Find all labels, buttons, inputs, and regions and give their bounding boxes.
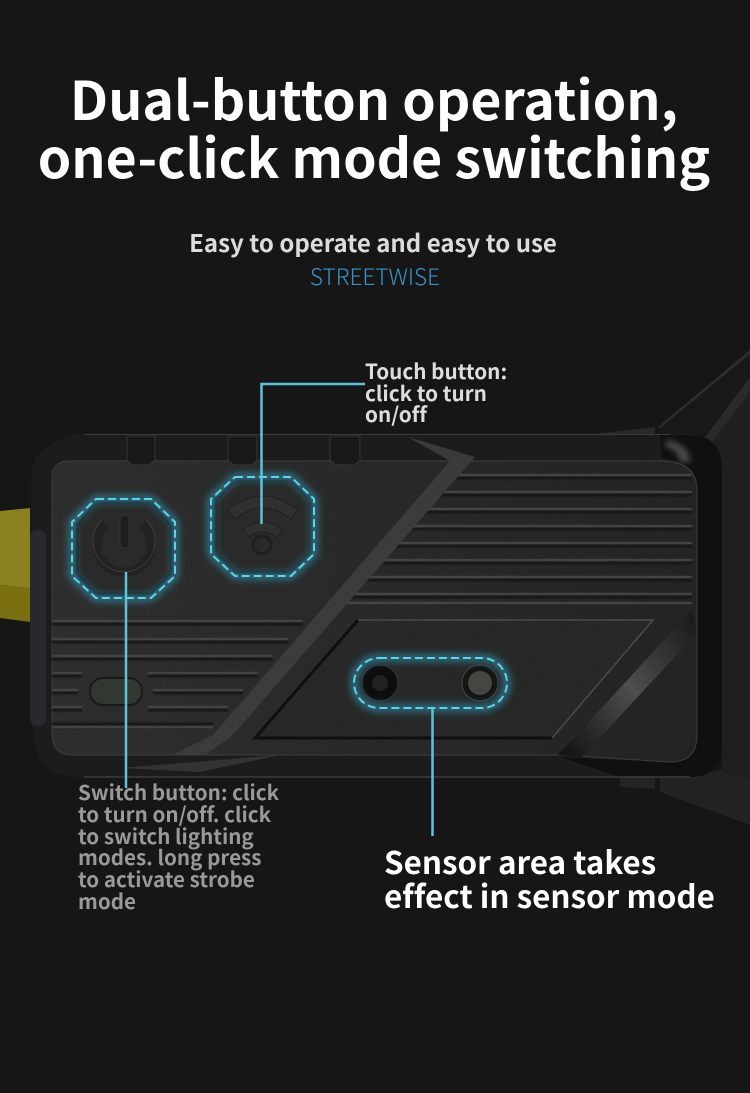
callout line: touch button	[262, 384, 365, 524]
label: switch button: to switch lighting	[78, 820, 254, 850]
title	[38, 59, 710, 194]
label: touch button: click to turn	[365, 376, 487, 406]
top notches	[127, 436, 360, 465]
label: switch button: mode	[78, 885, 136, 915]
right ribs panel	[335, 475, 692, 603]
callout line: sensor	[431, 708, 434, 836]
corner sheen	[558, 610, 697, 757]
side clip	[30, 530, 46, 726]
button: power	[77, 503, 171, 594]
dashed outlines	[72, 477, 507, 708]
label: sensor area: effect in sensor mode	[384, 873, 715, 918]
label: switch button	[78, 776, 279, 915]
label: touch button	[365, 355, 507, 428]
label: sensor area: Sensor area takes	[384, 839, 656, 884]
sensor recess panel	[255, 620, 653, 738]
button glow: power	[72, 499, 175, 598]
right housing wing	[595, 350, 750, 825]
button glow: touch	[211, 477, 314, 576]
label: switch button: modes. long press	[78, 841, 261, 871]
subtitle: Easy to operate and easy to use	[189, 224, 557, 259]
diagonal band	[172, 437, 475, 755]
label: sensor area	[384, 839, 715, 918]
label: touch button: on/off	[365, 398, 427, 428]
device illustration	[0, 350, 750, 836]
indicator light	[90, 678, 142, 705]
button: touch	[216, 481, 310, 572]
sensor lenses	[362, 665, 498, 701]
label: switch button: Switch button: click	[78, 776, 279, 806]
label: switch button: to turn on/off. click	[78, 798, 271, 828]
sensor glow	[354, 658, 507, 708]
device face plate	[52, 461, 697, 762]
surface grain	[52, 461, 697, 762]
title: one-click mode switching	[38, 117, 710, 194]
device body	[31, 434, 722, 777]
yellow reflector edge	[0, 508, 30, 622]
title: Dual-button operation,	[70, 59, 678, 136]
label: touch button: Touch button:	[365, 355, 507, 385]
label: switch button: to activate strobe	[78, 863, 255, 893]
brand name: STREETWISE	[310, 259, 440, 292]
left ribs panel	[52, 621, 303, 727]
callout line: switch button	[125, 572, 127, 788]
